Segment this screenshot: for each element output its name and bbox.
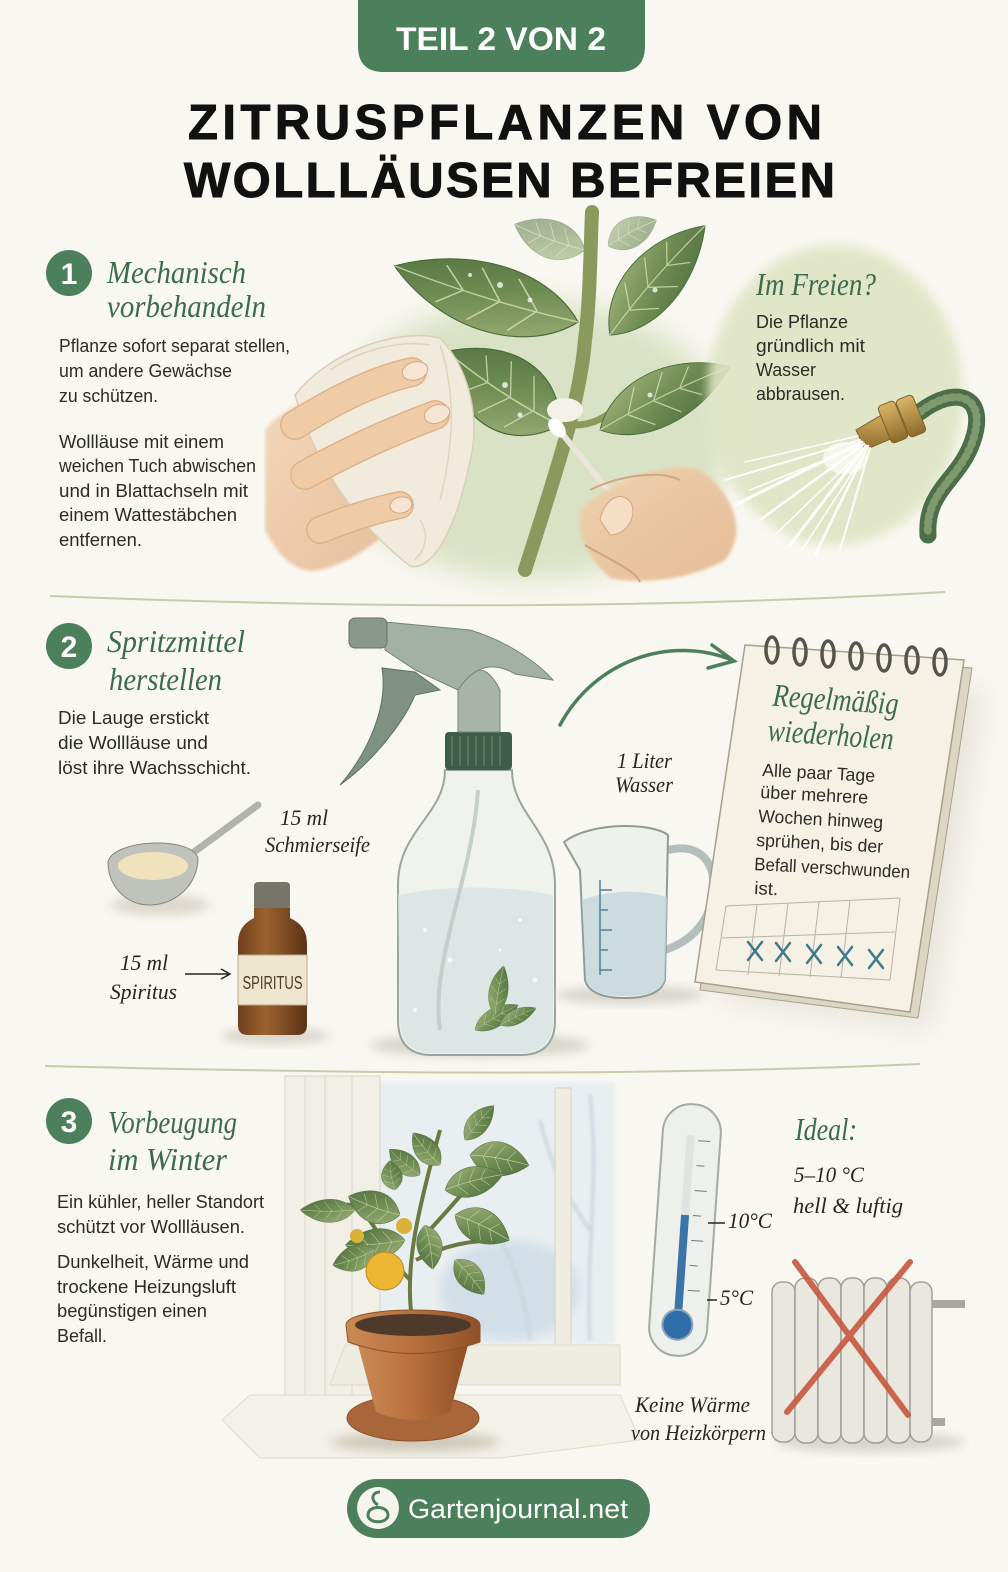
illustration: spirit bottle [220, 882, 330, 1044]
illustration: radiator crossed out [772, 1262, 965, 1452]
body text step 1: zu schützen. [59, 386, 158, 406]
check grid [716, 898, 900, 980]
label: 15 ml soft soap: 15 ml [280, 805, 328, 830]
body text step 2 [58, 708, 251, 778]
water spray [725, 436, 870, 555]
label: 1 litre water [615, 748, 673, 797]
step badge 3: 3 [61, 1106, 77, 1139]
note heading [767, 677, 900, 756]
body text step 1: weichen Tuch abwischen [58, 456, 256, 476]
label: no heat from radiators [631, 1392, 766, 1445]
body outdoor [756, 312, 865, 404]
illustration: citrus branch [330, 206, 741, 580]
body text step 3: Dunkelheit, Wärme und [57, 1252, 249, 1272]
heading step 1 [106, 254, 266, 324]
ideal conditions note: 5–10 °C [794, 1162, 864, 1187]
body text step 1 [58, 336, 290, 550]
illustration: thermometer [647, 1102, 723, 1358]
body text step 2: Die Lauge erstickt [58, 708, 209, 728]
step badge 2: 2 [61, 631, 77, 664]
body text step 3: Befall. [57, 1326, 107, 1346]
title: ZITRUSPFLANZEN VON [188, 96, 822, 150]
illustration: measuring jug [555, 826, 714, 1004]
body text step 2: löst ihre Wachsschicht. [58, 758, 251, 778]
ideal conditions note [793, 1111, 903, 1218]
title: WOLLLÄUSEN BEFREIEN [184, 154, 835, 208]
body text step 1: entfernen. [59, 530, 142, 550]
section 2: make the spray [46, 618, 985, 1057]
illustration: outdoor shower circle [707, 245, 977, 555]
ideal conditions note: Ideal: [794, 1111, 857, 1147]
illustration: notepad [695, 637, 985, 1030]
title [184, 96, 835, 208]
note body: Wochen hinweg [758, 806, 884, 833]
body outdoor: Die Pflanze [756, 312, 848, 332]
label: 15 ml spirit with arrow: Spiritus [110, 979, 177, 1004]
heading step 3 [108, 1104, 237, 1177]
footer brand pill: Gartenjournal.net [408, 1494, 629, 1524]
body text step 3: trockene Heizungsluft [57, 1277, 236, 1297]
heading step 2 [107, 623, 245, 697]
body text step 1: Wollläuse mit einem [59, 432, 224, 452]
note heading: wiederholen [767, 712, 895, 756]
body text step 1: und in Blattachseln mit [59, 481, 248, 501]
label: 1 litre water: 1 Liter [617, 748, 672, 773]
arrow to notepad [560, 645, 734, 725]
note body: Alle paar Tage [762, 760, 876, 786]
body text step 3: schützt vor Wollläusen. [57, 1217, 245, 1237]
heading step 3: im Winter [108, 1141, 228, 1177]
label: 1 litre water: Wasser [615, 772, 673, 797]
label: temperature marks: 10°C [728, 1208, 772, 1233]
label: no heat from radiators: Keine Wärme [634, 1392, 750, 1417]
label: 15 ml soft soap: Schmierseife [265, 832, 370, 857]
note body: Befall verschwunden [754, 854, 911, 882]
heading step 2: herstellen [109, 661, 222, 697]
label: temperature marks: 5°C [720, 1285, 753, 1310]
body text step 3 [57, 1192, 264, 1346]
illustration: spray bottle [340, 618, 590, 1057]
note body: über mehrere [760, 782, 869, 808]
body text step 1: einem Wattestäbchen [59, 505, 237, 525]
hose [920, 397, 977, 535]
label: 15 ml soft soap [265, 805, 370, 857]
illustration: hand wiping with cloth [265, 336, 474, 571]
step badge 1: 1 [61, 258, 77, 291]
body text step 3: begünstigen einen [57, 1301, 207, 1321]
step badge 1 [46, 250, 92, 296]
label: 15 ml spirit with arrow: 15 ml [120, 950, 168, 975]
label: 15 ml spirit with arrow [110, 950, 230, 1004]
section 1: mechanical pre-treatment [46, 206, 977, 582]
step badge 3 [46, 1098, 92, 1144]
body outdoor: abbrausen. [756, 384, 845, 404]
label: no heat from radiators: von Heizkörpern [631, 1420, 766, 1445]
heading step 3: Vorbeugung [108, 1104, 237, 1140]
body text step 3: Ein kühler, heller Standort [57, 1192, 264, 1212]
spiral rings [766, 637, 946, 675]
body text step 1: Pflanze sofort separat stellen, [59, 336, 290, 356]
heading outdoor: Im Freien? [755, 266, 876, 302]
top tab: part label: TEIL 2 VON 2 [396, 21, 606, 57]
illustration: potted citrus tree [300, 1098, 532, 1452]
note heading: Regelmäßig [771, 677, 900, 721]
illustration: window [222, 1076, 640, 1458]
illustration: hand with cotton swab [545, 415, 736, 582]
note body [754, 760, 911, 899]
top tab: part label [358, 0, 645, 72]
icon: brand logo [357, 1487, 399, 1529]
body text step 2: die Wollläuse und [58, 733, 208, 753]
heading step 1: vorbehandeln [107, 288, 266, 324]
body outdoor: Wasser [756, 360, 816, 380]
heading step 1: Mechanisch [106, 254, 246, 290]
ideal conditions note: hell & luftig [793, 1193, 903, 1218]
footer brand pill [347, 1479, 650, 1538]
illustration: spoon of soft soap [108, 805, 258, 915]
label: temperature marks [707, 1208, 772, 1310]
note body: sprühen, bis der [756, 830, 884, 857]
brass nozzle [856, 394, 927, 450]
heading step 2: Spritzmittel [107, 623, 245, 659]
note body: ist. [754, 878, 779, 899]
illustration: spirit bottle: SPIRITUS [242, 973, 302, 993]
body outdoor: gründlich mit [756, 336, 865, 356]
section 3: winter prevention [46, 1076, 965, 1458]
body text step 1: um andere Gewächse [59, 361, 232, 381]
step badge 2 [46, 623, 92, 669]
terracotta pot [346, 1310, 480, 1441]
